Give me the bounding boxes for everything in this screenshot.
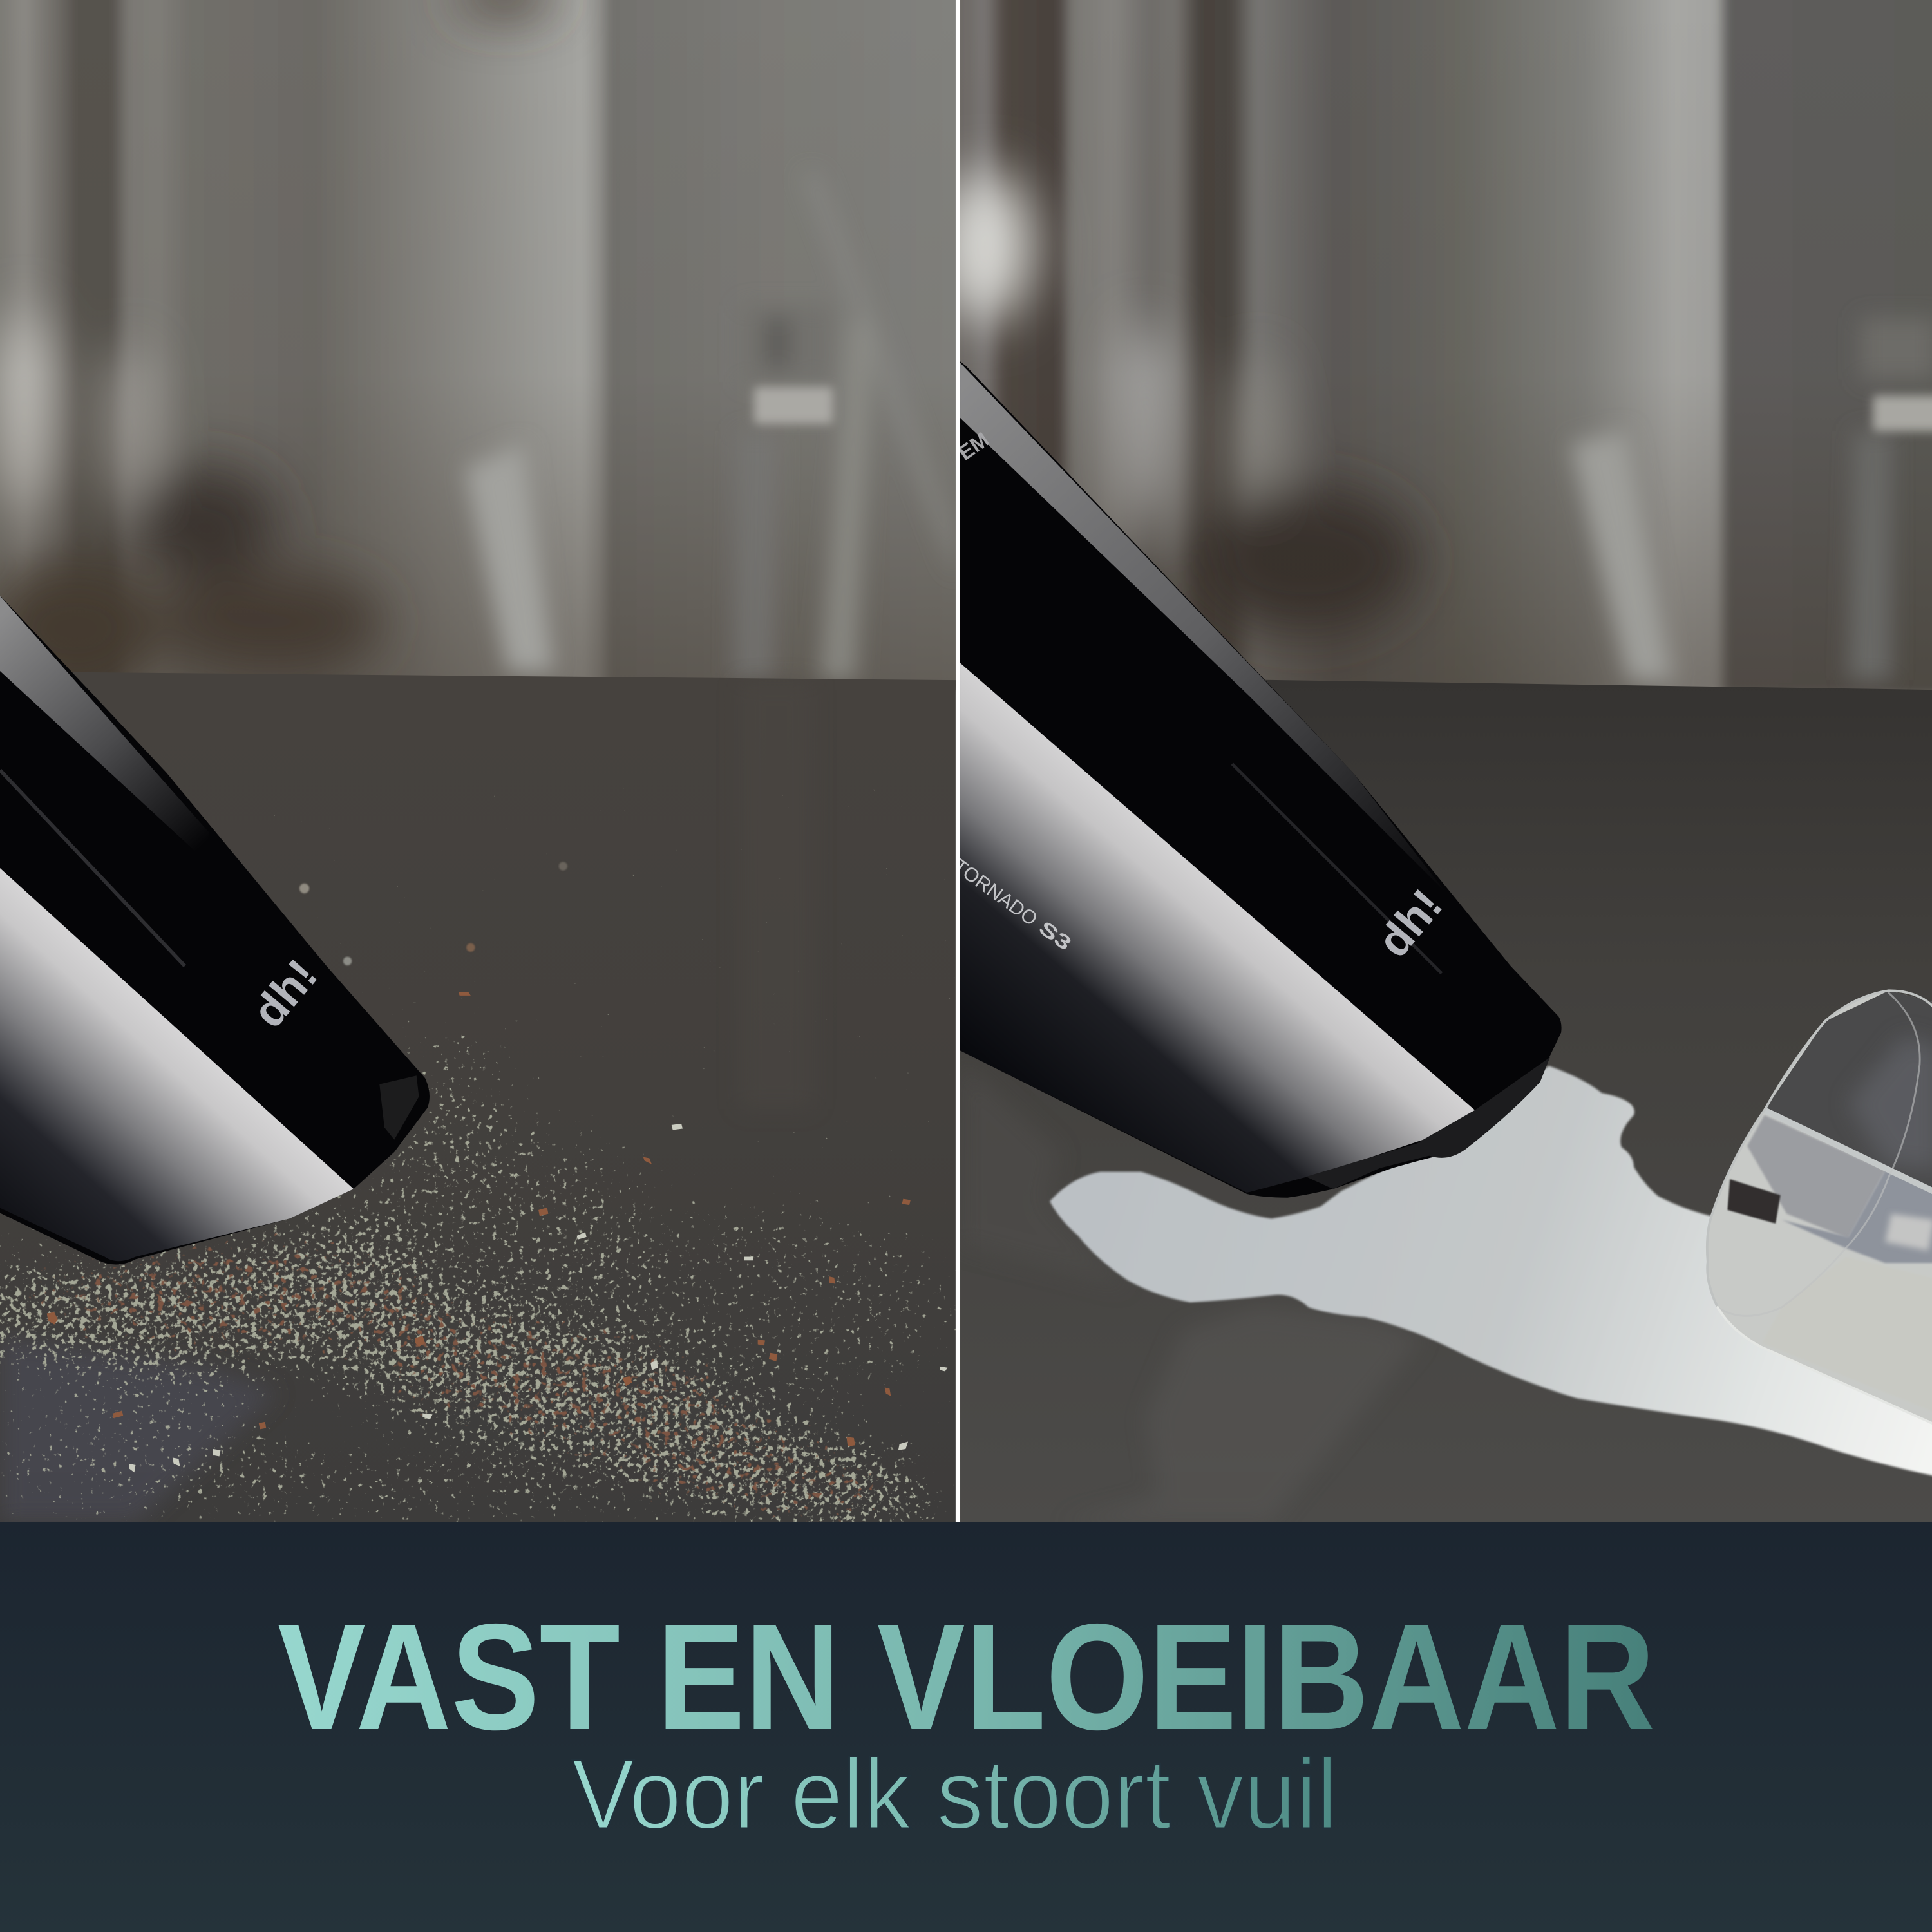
glossy top stripe <box>0 589 209 859</box>
reflection streak <box>1232 764 1442 973</box>
blurred wall background left <box>0 0 1010 696</box>
white page background and divider <box>0 0 1932 1523</box>
nozzle lip <box>1306 1057 1550 1189</box>
countertop reflection right <box>961 1059 1423 1523</box>
clipped lettering on body: EM <box>954 428 993 465</box>
title: VAST EN VLOEIBAAR <box>278 1592 1655 1761</box>
overturned glass <box>1688 973 1932 1442</box>
model name: S3 <box>1035 917 1075 955</box>
pale reflection area <box>1848 1035 1932 1171</box>
reflection streaks <box>0 770 185 966</box>
individual debris pieces <box>47 862 947 1472</box>
countertop right <box>949 675 1932 1523</box>
bottom banner <box>0 1522 1932 1932</box>
silver band <box>0 862 354 1261</box>
glossy top stripe <box>955 357 1446 893</box>
brand logo: dh! <box>1368 880 1452 967</box>
debris: brown seed fragments <box>15 1233 878 1522</box>
glass rim outlines <box>1707 990 1932 1423</box>
counter seen through glass <box>1765 990 1932 1201</box>
vacuum body <box>0 589 430 1265</box>
model name <box>949 855 1075 955</box>
panel: right photo with spilled milk <box>912 0 1932 1523</box>
silver band <box>949 653 1475 1193</box>
countertop reflection left <box>0 1340 265 1522</box>
handheld vacuum left <box>0 589 430 1265</box>
milk inside glass <box>1688 973 1932 1442</box>
vacuum body <box>949 357 1562 1198</box>
spilled milk <box>1050 1066 1932 1479</box>
blurred wall background right <box>912 0 1932 696</box>
countertop left <box>0 672 956 1523</box>
brand logo: dh! <box>243 950 328 1037</box>
debris: green herb flakes <box>0 1016 961 1565</box>
model name: TORNADO <box>949 855 1041 930</box>
nozzle facet <box>379 1075 419 1140</box>
panel: left photo with solid debris <box>0 0 1010 1565</box>
bright waterline <box>1765 1110 1932 1198</box>
subtitle: Voor elk stoort vuil <box>572 1739 1338 1850</box>
handheld vacuum right <box>949 357 1562 1198</box>
